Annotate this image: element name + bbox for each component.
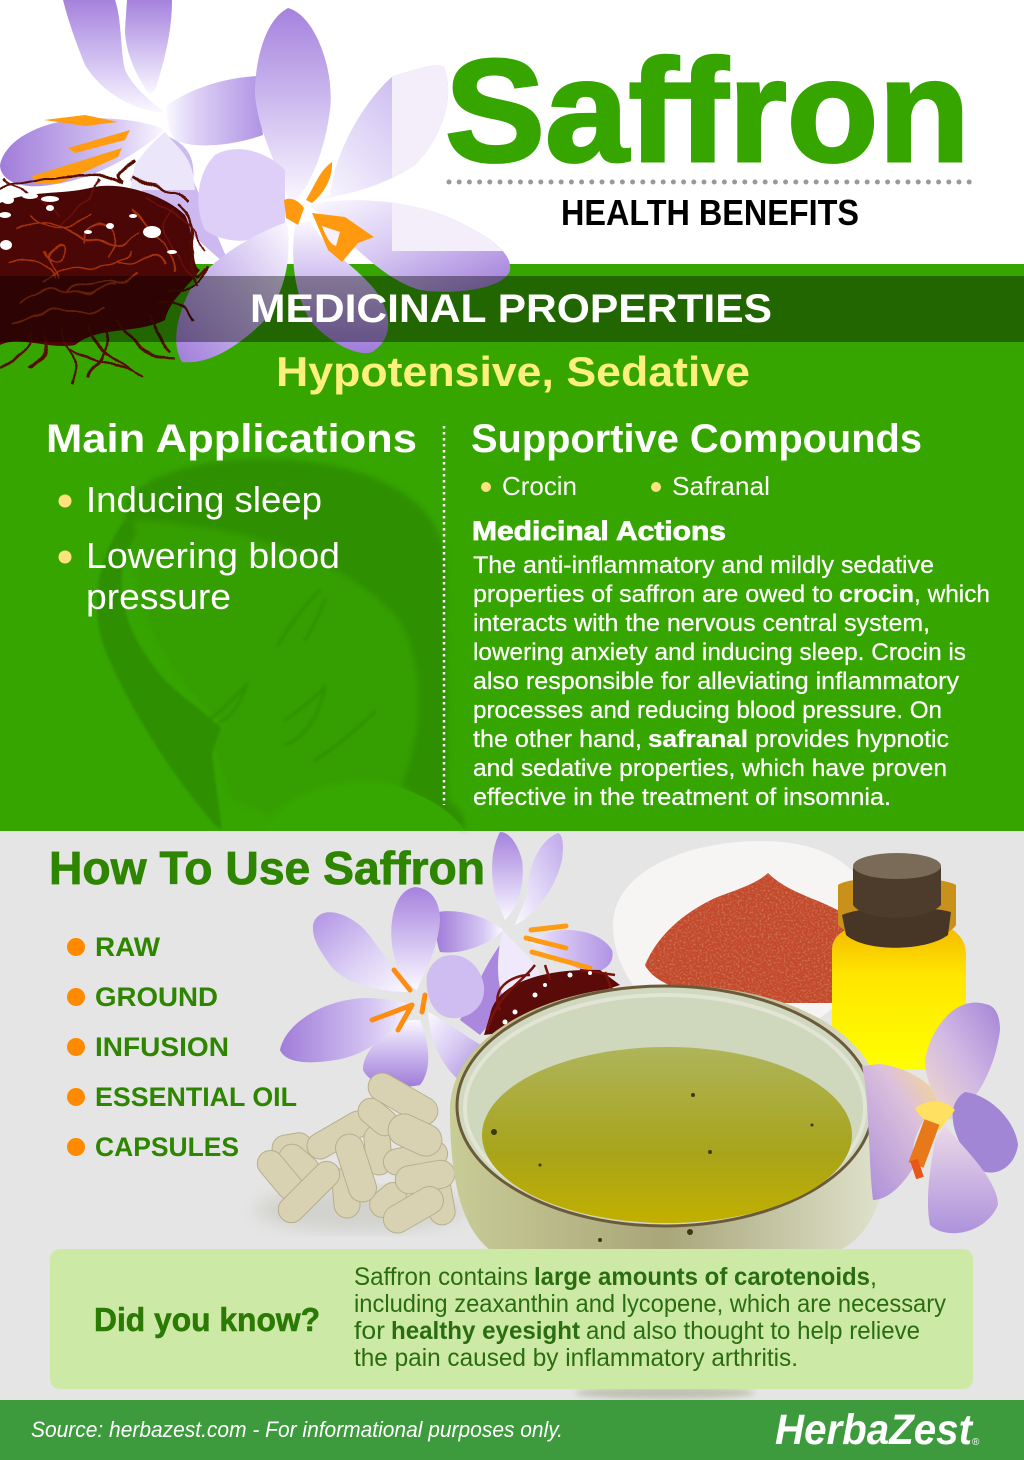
background: white header	[0, 0, 1024, 264]
list: uses	[67, 932, 297, 1162]
image: saffron crocus flower, front	[176, 8, 510, 362]
list item: essential oil: ESSENTIAL OIL	[95, 1082, 297, 1112]
callout text	[354, 1263, 946, 1372]
list item: ground: GROUND	[95, 982, 218, 1012]
divider: dotted rule under title	[449, 180, 970, 184]
list item: infusion: INFUSION	[95, 1032, 229, 1062]
text block: medicinal actions body: lowering anxiety and inducing sleep. Crocin is	[473, 639, 966, 666]
text block: medicinal actions body: and sedative properties, which have proven	[473, 755, 947, 782]
callout: did you know	[50, 1249, 973, 1389]
bullet: safranal: Safranal	[672, 471, 770, 501]
subheading: hypotensive, sedative: Hypotensive, Sedative	[276, 348, 750, 395]
callout text: including zeaxanthin and lycopene, which are necessary	[354, 1290, 946, 1318]
list item: capsules: CAPSULES	[95, 1132, 239, 1162]
callout text: the pain caused by inflammatory arthritis.	[354, 1344, 798, 1372]
footer source: Source: herbazest.com - For informational purposes only.	[31, 1417, 563, 1442]
heading band: dark green strip	[0, 276, 1024, 342]
heading: how to use saffron: How To Use Saffron	[49, 842, 485, 894]
title: Saffron	[445, 29, 970, 192]
image: capsules	[252, 1068, 465, 1238]
bullet: lowering blood pressure: pressure	[86, 576, 231, 617]
callout text: large amounts of carotenoids	[534, 1263, 870, 1291]
image: crocus flower right	[862, 1003, 1018, 1233]
text block: medicinal actions body: , which	[914, 581, 990, 608]
callout text: for	[354, 1317, 385, 1345]
image: saffron threads centre	[484, 965, 620, 1035]
image: white bowl of ground saffron	[613, 841, 872, 1040]
text block: medicinal actions body: provides hypnotic	[755, 726, 949, 753]
text block: medicinal actions body: crocin	[839, 581, 914, 608]
text block: medicinal actions body: interacts with the nervous central system,	[473, 610, 930, 637]
footer bar	[0, 1400, 1024, 1460]
bullet: inducing sleep: Inducing sleep	[86, 479, 322, 520]
image: crocus flower behind bowl	[436, 832, 613, 1035]
text block: medicinal actions body: processes and reducing blood pressure. On	[473, 697, 942, 724]
text block: medicinal actions body: the other hand,	[473, 726, 642, 753]
image: tea bowl	[450, 985, 882, 1399]
callout heading: Did you know?	[94, 1301, 320, 1338]
footer logo: ®	[972, 1437, 980, 1448]
panel: supportive compounds	[471, 417, 990, 811]
callout text: healthy eyesight	[391, 1317, 581, 1345]
text block: medicinal actions body: effective in the treatment of insomnia.	[473, 784, 891, 811]
text block: medicinal actions body: properties of saffron are owed to	[473, 581, 833, 608]
panel: medicinal properties green background	[0, 264, 1024, 831]
subtitle: HEALTH BENEFITS	[561, 192, 859, 233]
callout text: Saffron contains	[354, 1263, 528, 1291]
heading: medicinal actions: Medicinal Actions	[472, 516, 726, 546]
list item: raw: RAW	[95, 932, 161, 962]
heading: main applications: Main Applications	[46, 417, 417, 461]
panel: main applications	[46, 417, 417, 617]
text block: medicinal actions body: The anti-inflammatory and mildly sedative	[473, 552, 934, 579]
panel: how to use grey background	[0, 831, 1024, 1400]
image: crocus flower centre	[280, 887, 490, 1087]
footer logo: HerbaZest	[775, 1406, 974, 1454]
bullet: lowering blood pressure: Lowering blood	[86, 535, 340, 576]
image: essential oil bottle	[832, 853, 966, 1070]
bullet: lowering blood pressure	[58, 535, 340, 617]
callout text: ,	[870, 1263, 877, 1291]
heading: supportive compounds: Supportive Compounds	[471, 417, 922, 461]
list item: raw	[67, 932, 161, 962]
text block: medicinal actions body: also responsible for alleviating inflammatory	[473, 668, 959, 695]
bullet: crocin: Crocin	[502, 471, 577, 501]
photo: woman sleeping tinted green	[97, 459, 465, 831]
image: saffron threads top left	[0, 162, 208, 385]
callout text: and also thought to help relieve	[586, 1317, 920, 1345]
heading: medicinal properties: MEDICINAL PROPERTIES	[250, 287, 772, 331]
text block: medicinal actions body: safranal	[648, 726, 748, 753]
image: saffron crocus flower, back	[0, 0, 263, 270]
text block: medicinal actions body	[473, 552, 990, 811]
